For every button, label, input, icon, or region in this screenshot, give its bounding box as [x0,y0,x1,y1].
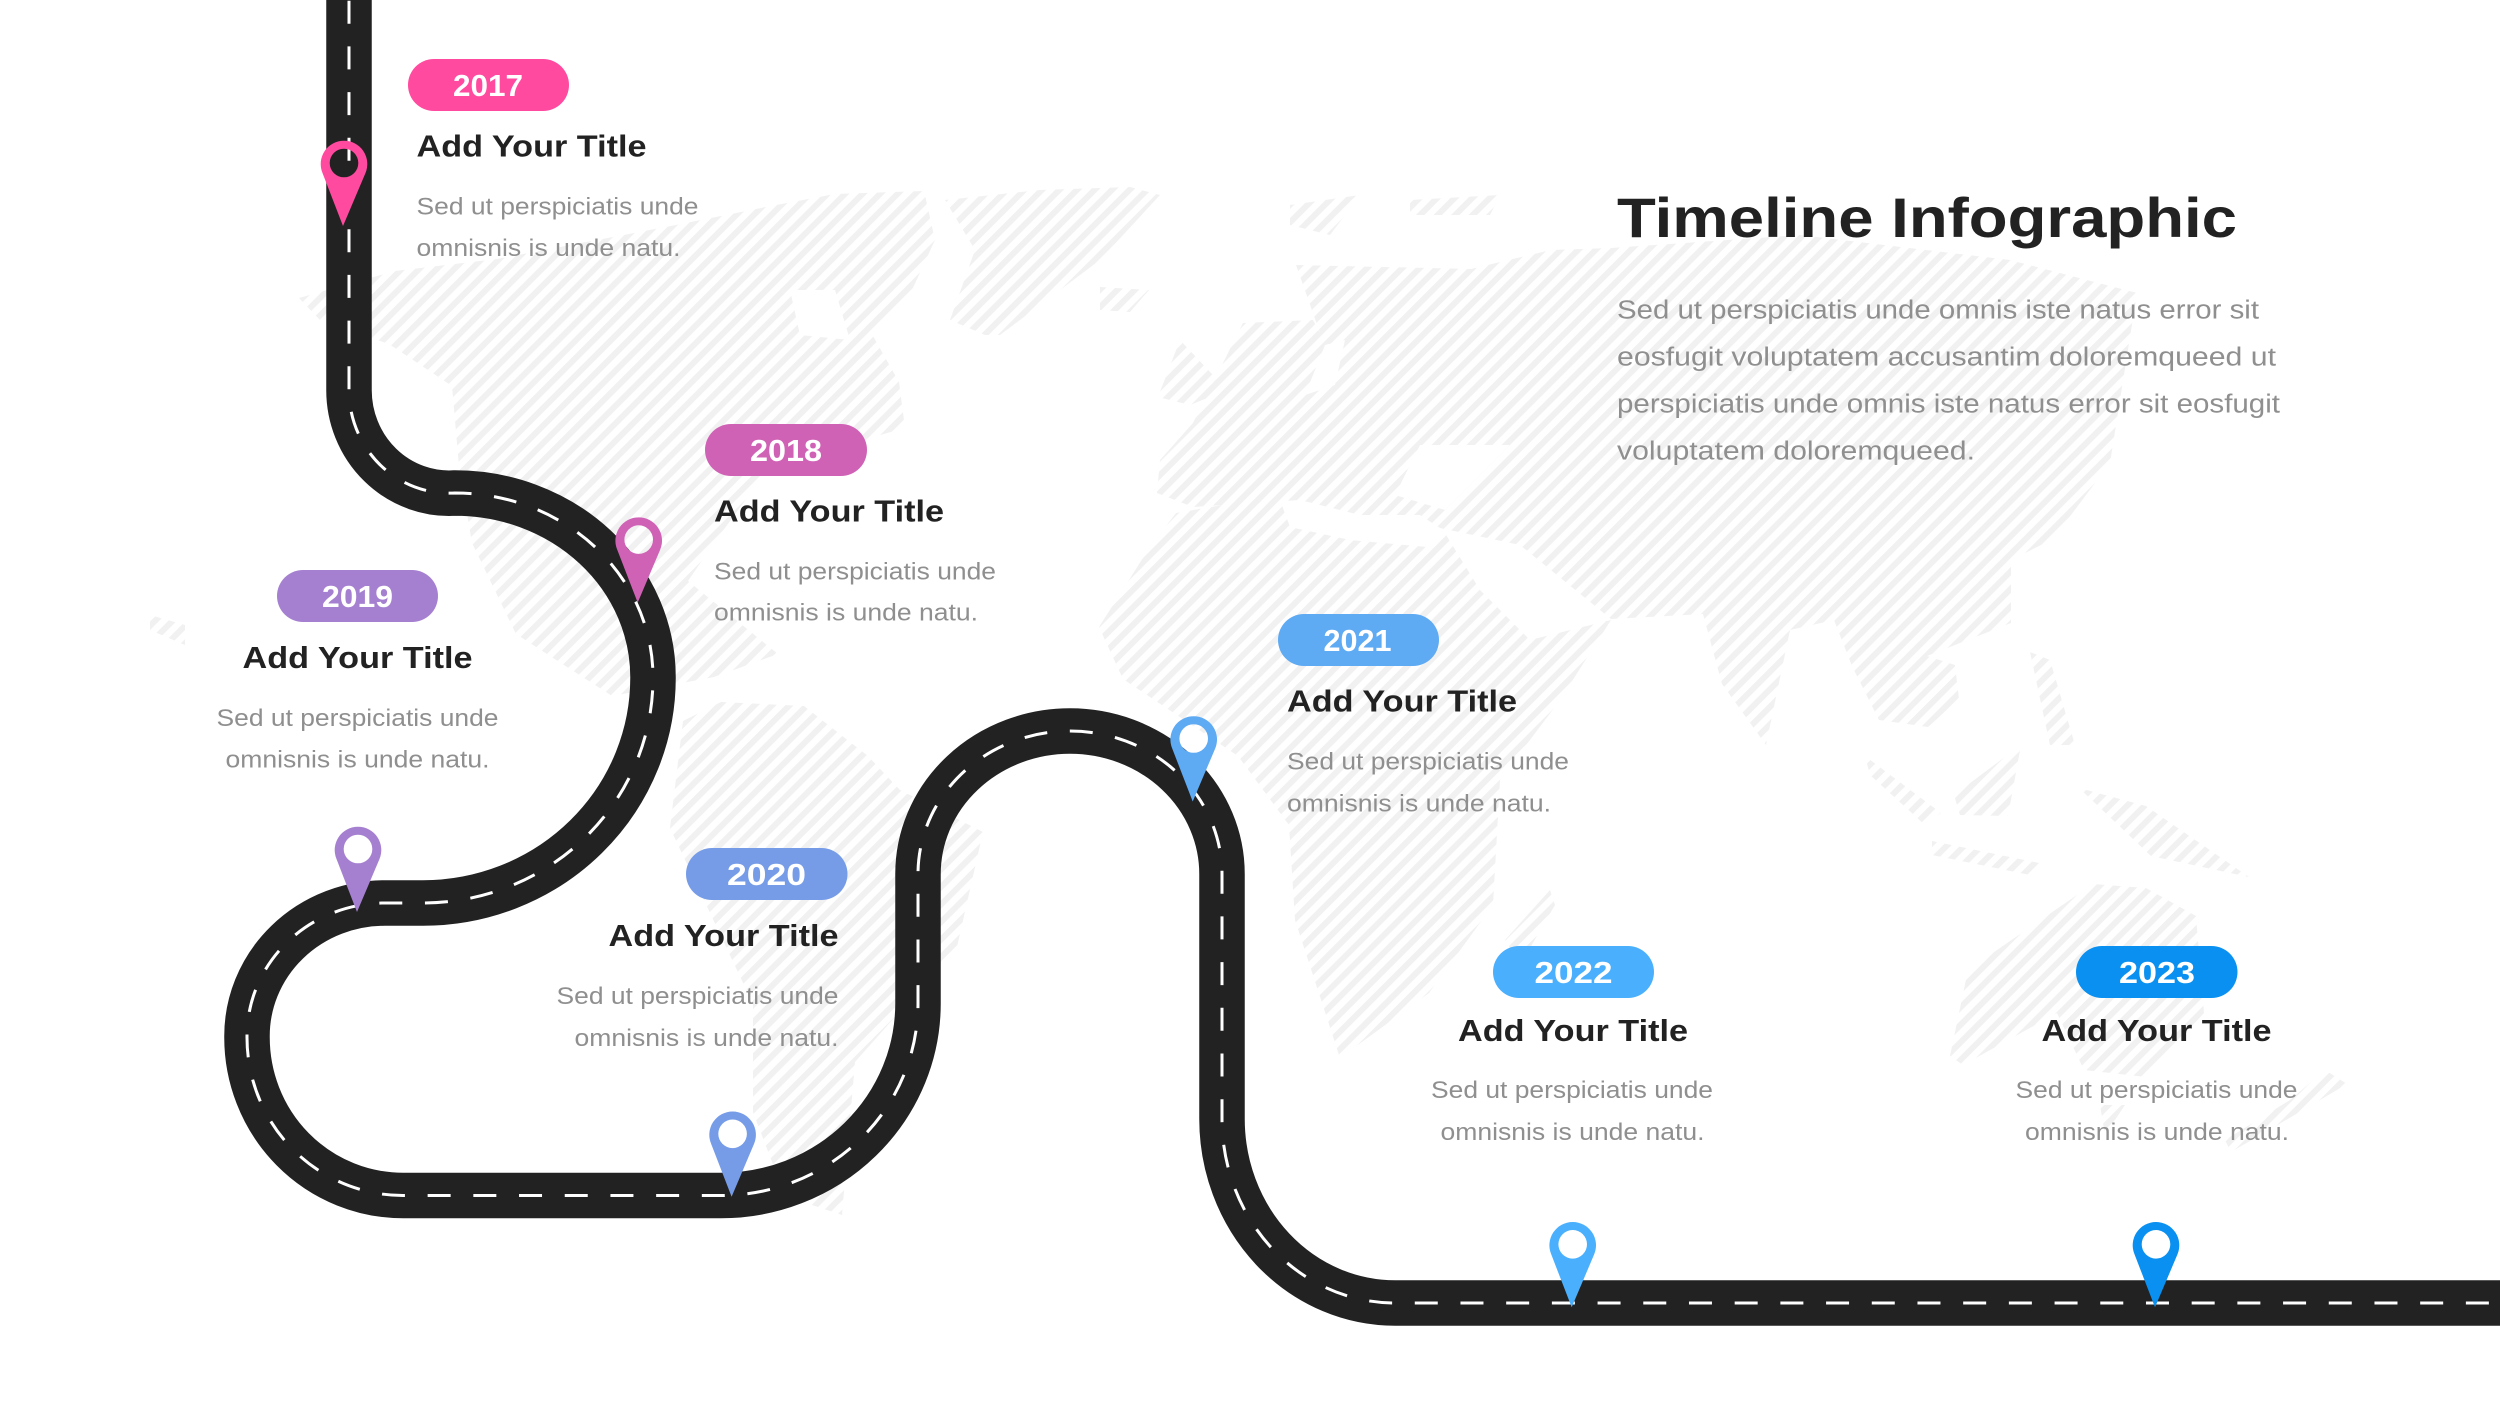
card: 2023 [2016,946,2298,1146]
year pill 2018: 2018 [750,433,822,468]
card description 2017: Sed ut perspiciatis unde [416,193,698,220]
card title 2020: Add Your Title [608,918,838,953]
card description 2022: Sed ut perspiciatis unde [1431,1077,1713,1104]
card description 2023: omnisnis is unde natu. [2025,1119,2289,1146]
card description 2017: omnisnis is unde natu. [416,235,680,262]
pin: 2017 [321,141,367,226]
intro paragraph: voluptatem doloremqueed. [1617,438,1975,466]
card description 2019: omnisnis is unde natu. [226,746,490,774]
year pill 2018 [705,424,867,476]
year pill 2023 [2076,946,2238,998]
year pill 2023: 2023 [2119,955,2195,990]
card title 2021: Add Your Title [1287,684,1517,718]
year pill 2021 [1278,614,1439,666]
card description 2023 [2016,1077,2298,1146]
card description 2020: Sed ut perspiciatis unde [556,983,838,1010]
card title 2018: Add Your Title [714,494,944,528]
pin: 2021 [1170,716,1217,802]
year pill 2019 [277,570,438,622]
year pill 2017: 2017 [453,68,523,103]
card description 2019: Sed ut perspiciatis unde [216,705,498,732]
card description 2018: omnisnis is unde natu. [714,600,978,626]
card description 2018 [714,558,996,626]
pin: 2023 [2133,1222,2179,1307]
pin: 2019 [335,827,381,912]
background: hatched world map [150,187,2347,1215]
card title 2023: Add Your Title [2042,1013,2272,1048]
card description 2021: Sed ut perspiciatis unde [1287,748,1569,776]
card title 2022: Add Your Title [1458,1013,1688,1048]
pin: 2020 [709,1112,756,1197]
year pill 2019: 2019 [322,579,393,614]
year pill 2022 [1493,946,1654,998]
pin: 2022 [1549,1222,1596,1307]
card description 2020 [556,983,838,1052]
card: 2019 [216,570,498,774]
year pill 2020 [686,848,848,900]
card: 2017 [408,59,698,262]
card description 2022: omnisnis is unde natu. [1440,1119,1704,1146]
year pill 2021: 2021 [1324,623,1392,658]
intro paragraph: eosfugit voluptatem accusantim doloremqueed ut [1617,344,2276,372]
card description 2019 [216,705,498,774]
heading: Timeline Infographic: Timeline Infographic [1617,186,2237,249]
intro paragraph: perspiciatis unde omnis iste natus error sit eosfugit [1617,390,2280,418]
year pill 2017 [408,59,569,111]
card: 2022 [1431,946,1713,1146]
card description 2017 [416,193,698,262]
card description 2021 [1287,748,1569,818]
card title 2017: Add Your Title [416,129,646,164]
pin: 2018 [615,517,662,603]
card title 2019: Add Your Title [242,640,472,675]
year pill 2022: 2022 [1534,955,1612,990]
card: 2021 [1278,614,1569,818]
card description 2022 [1431,1077,1713,1146]
card: 2020 [556,848,848,1052]
intro paragraph [1617,296,2280,466]
card description 2023: Sed ut perspiciatis unde [2016,1077,2298,1104]
card: 2018 [705,424,996,626]
intro paragraph: Sed ut perspiciatis unde omnis iste natus error sit [1617,296,2259,324]
card description 2018: Sed ut perspiciatis unde [714,558,996,586]
card description 2021: omnisnis is unde natu. [1287,790,1551,818]
year pill 2020: 2020 [727,857,806,892]
card description 2020: omnisnis is unde natu. [574,1025,838,1052]
